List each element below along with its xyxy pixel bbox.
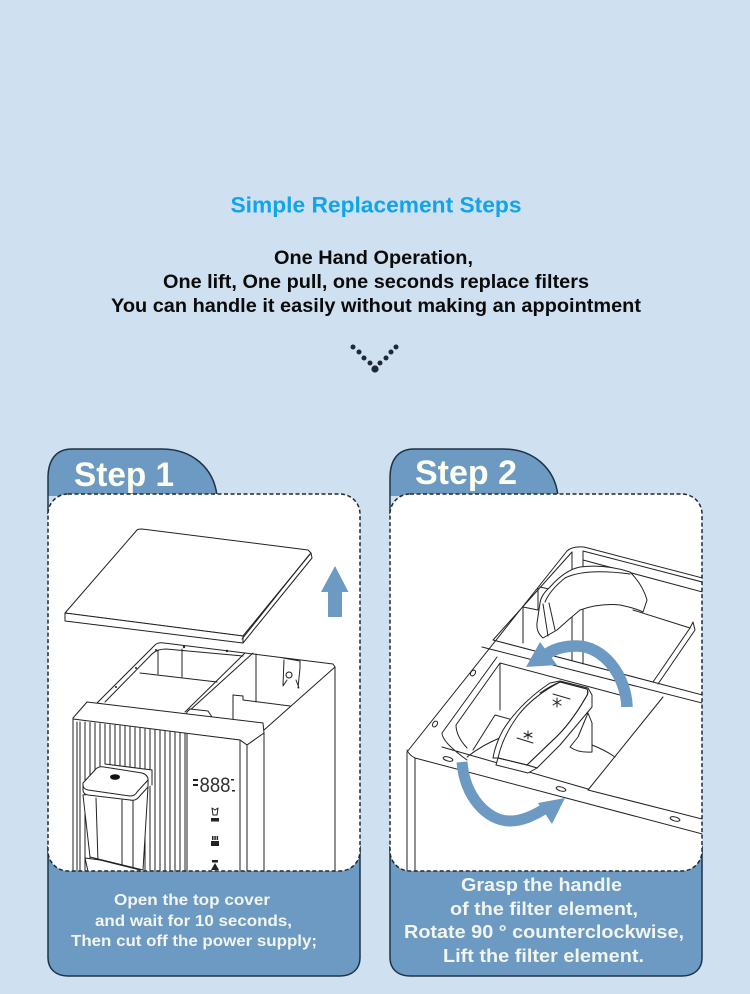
step 1 illustration panel (48, 494, 360, 871)
step 1 caption: Then cut off the power supply; (71, 933, 317, 950)
icon: dotted down chevron (350, 344, 398, 373)
step 2 caption: Grasp the handle (461, 875, 622, 895)
ribs (80, 722, 185, 871)
step 2 illustration panel (390, 494, 702, 871)
display readout: 888 (200, 774, 230, 797)
step 2 tab background (390, 449, 558, 514)
title: Simple Replacement Steps (230, 192, 522, 218)
intro text: You can handle it easily without making an appointment (111, 296, 642, 317)
step 2 caption: Rotate 90 ° counterclockwise, (404, 922, 684, 942)
housing (407, 547, 710, 880)
illustration: water purifier with lifted cover (65, 529, 335, 880)
illustration: filter housing and handle (407, 547, 710, 880)
arrow: rotate counterclockwise bottom (462, 762, 565, 824)
mounting holes (431, 669, 680, 822)
arrow: up (321, 566, 348, 617)
step 1 caption: and wait for 10 seconds, (95, 913, 292, 930)
handle marks (517, 694, 570, 743)
display readout (193, 778, 235, 792)
step 2 heading: Step 2 (415, 454, 517, 492)
step 2 caption background (390, 846, 702, 976)
step 1 dashed border (48, 494, 360, 871)
panel: step 2 (390, 449, 710, 976)
step 1 tab background (48, 449, 217, 514)
rear filter handle (537, 566, 647, 638)
water tank (83, 764, 152, 880)
top cover (65, 529, 312, 643)
panel: step 1 (48, 449, 360, 976)
step 2 dashed border (390, 494, 702, 871)
step 2 caption (404, 875, 684, 966)
step 1 caption background (48, 846, 360, 976)
step 2 caption: Lift the filter element. (443, 946, 644, 966)
front handle (493, 681, 592, 773)
control icons (211, 808, 219, 870)
step 1 heading: Step 1 (74, 456, 174, 494)
intro text (111, 248, 642, 317)
step 1 caption (71, 892, 317, 950)
intro text: One lift, One pull, one seconds replace filters (163, 272, 589, 293)
machine body (97, 643, 335, 880)
step 1 caption: Open the top cover (114, 892, 270, 909)
intro text: One Hand Operation, (274, 248, 473, 269)
front panel (73, 702, 264, 880)
arrow: rotate counterclockwise top (526, 642, 627, 707)
step 2 caption: of the filter element, (450, 899, 638, 919)
